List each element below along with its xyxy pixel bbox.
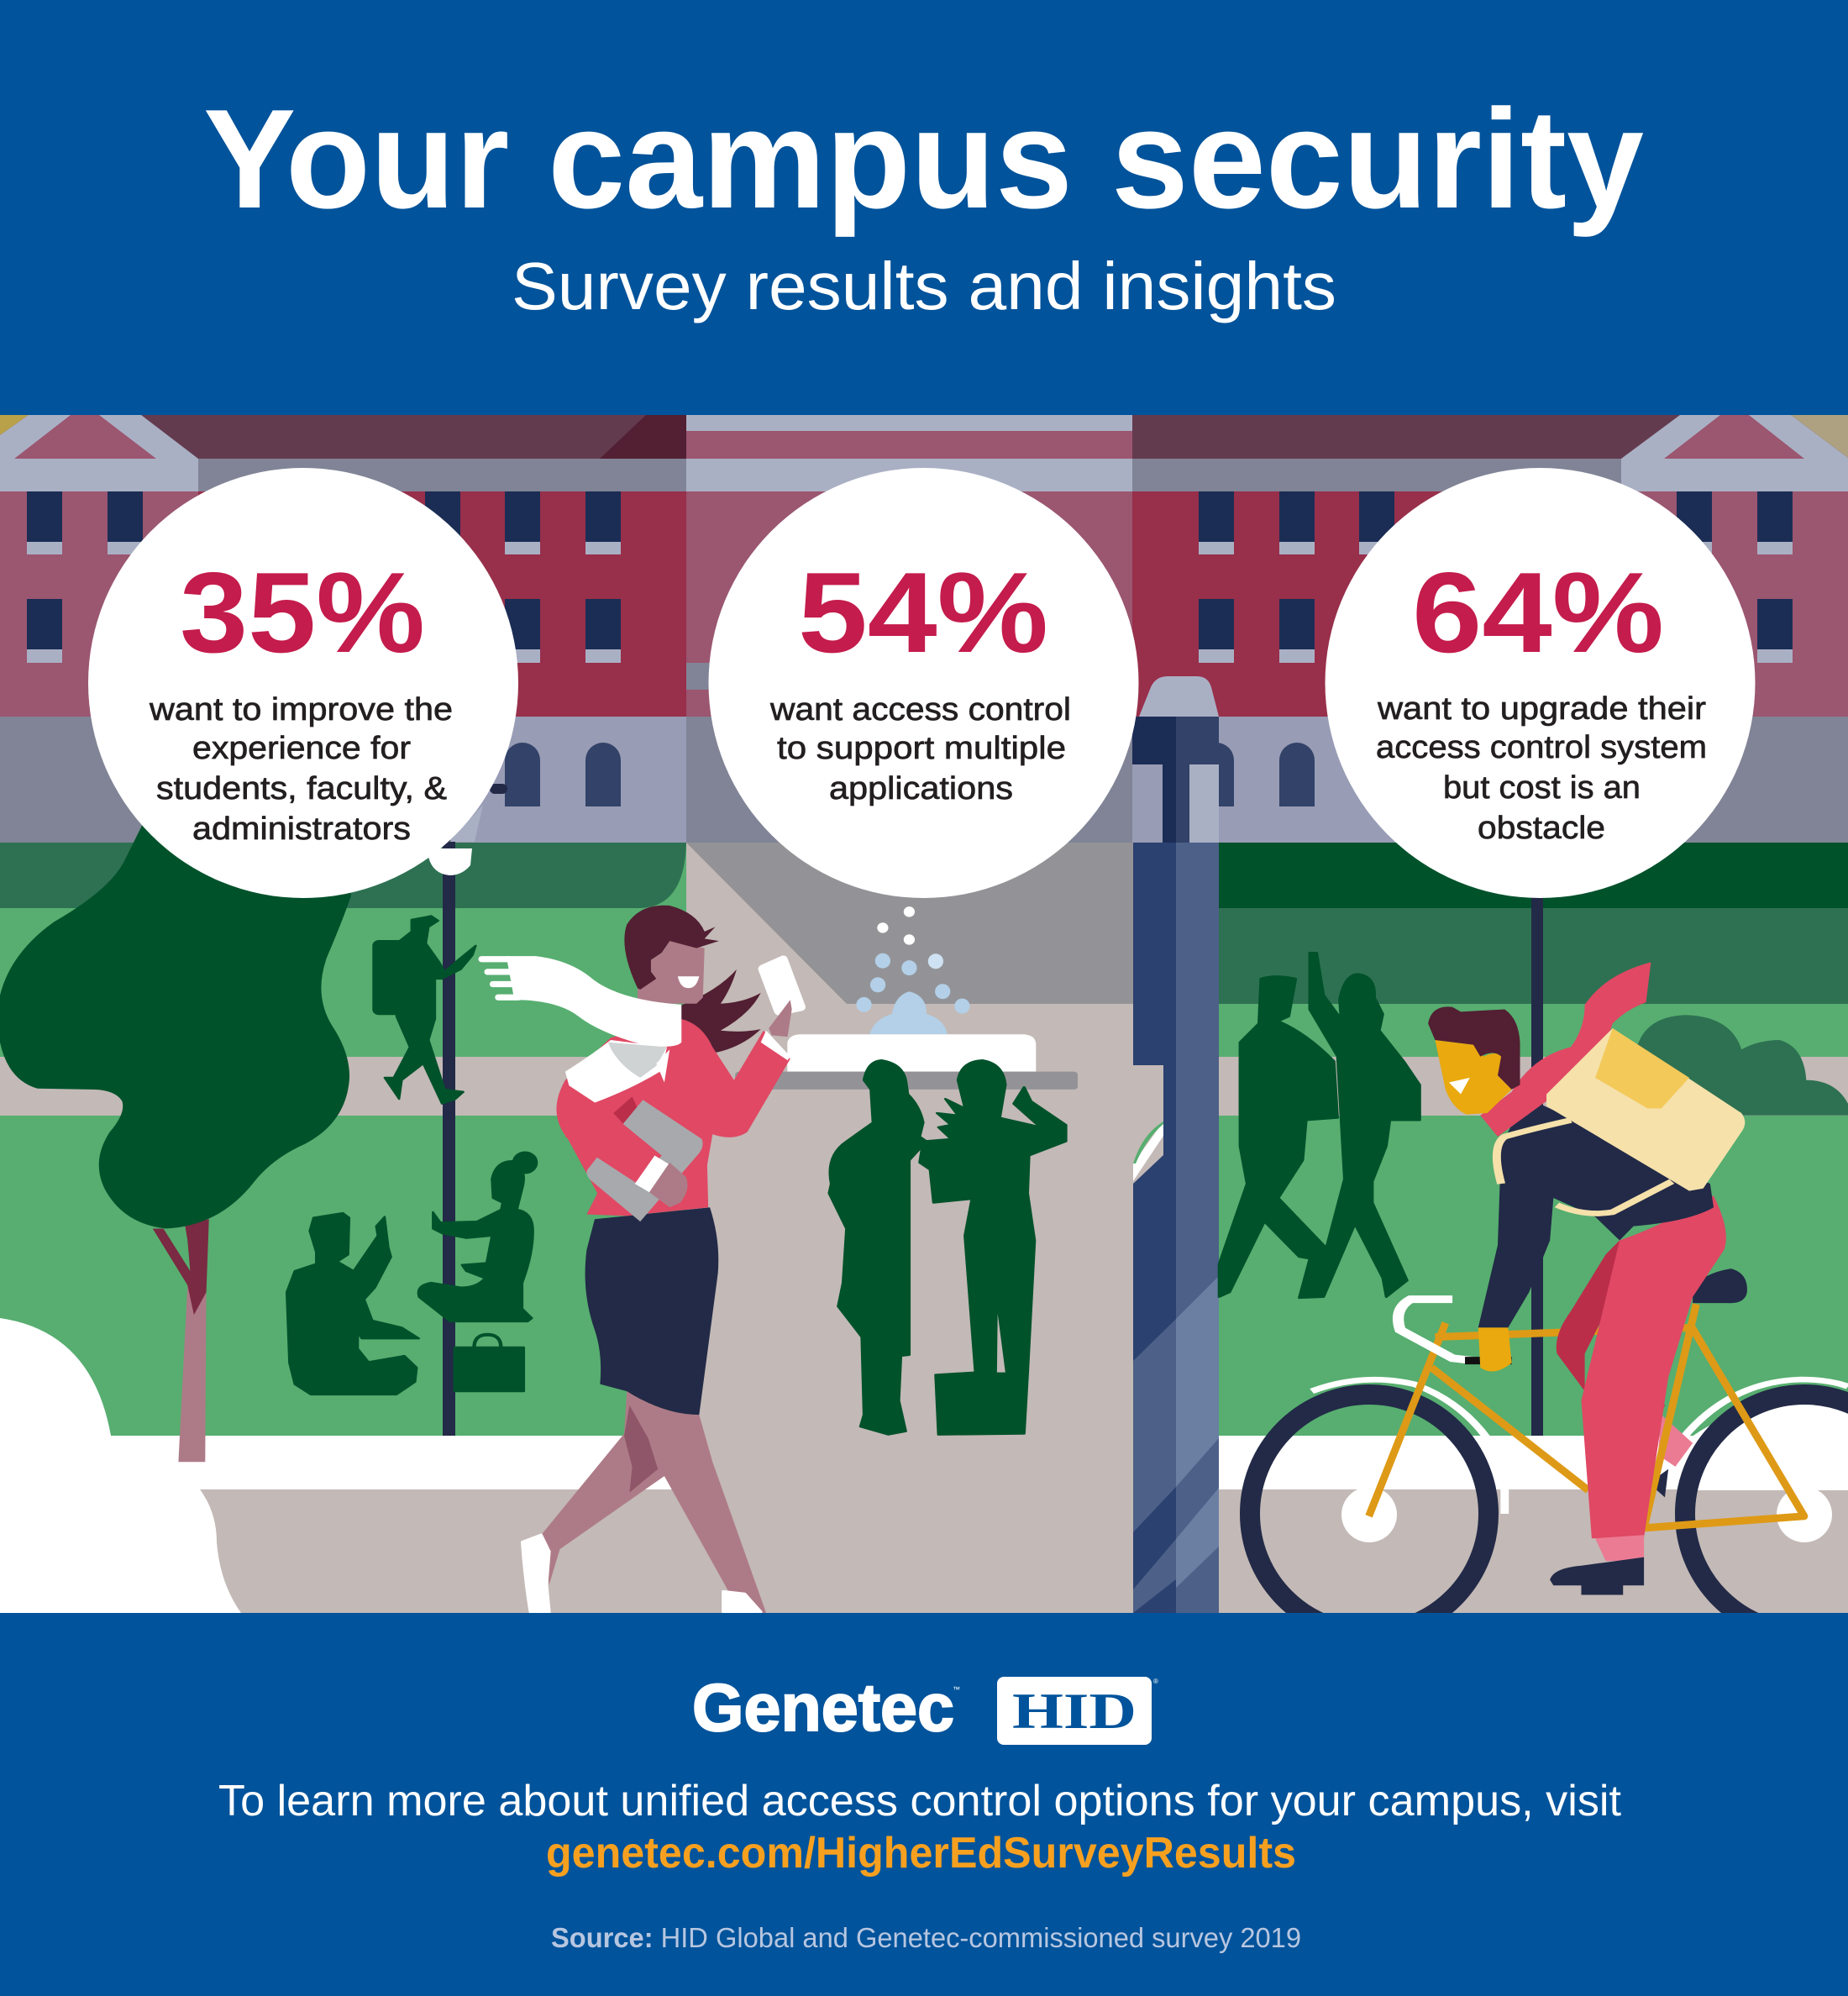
stat number: 54% [798, 549, 1048, 676]
stat circle: 35% [88, 468, 518, 898]
stat description: experience for [192, 731, 411, 766]
woman: phone and hand [758, 955, 806, 1060]
plaza and fountain ground [686, 843, 1133, 1613]
rear hub [1777, 1487, 1832, 1542]
central lamp post [1132, 676, 1219, 1613]
fountain [735, 906, 1078, 1090]
cyclist: scarf [1480, 962, 1651, 1137]
bicycle frame [1369, 1304, 1804, 1528]
left lamp post pole [443, 840, 455, 1436]
stat description: to support multiple [777, 731, 1066, 766]
stat number: 64% [1412, 549, 1664, 676]
cyclist: far leg [1626, 1382, 1693, 1497]
stat description [1376, 691, 1707, 846]
woman: legs [541, 1391, 766, 1613]
stat circle: 64% [1326, 468, 1756, 898]
bicycle mudguards [1312, 1379, 1848, 1514]
cyclist: trousers [1557, 1195, 1726, 1538]
silhouette: walking man [1219, 976, 1337, 1297]
source: Source: HID Global and Genetec-commissioned survey 2019 [551, 1922, 1301, 1953]
silhouette: walking woman [1299, 953, 1420, 1298]
stat description: students, faculty, & [156, 771, 447, 806]
stat description [769, 692, 1071, 806]
woman: arm and hand [565, 1085, 688, 1207]
stat circle: 54% [709, 468, 1139, 898]
silhouette: standing woman [829, 1060, 927, 1435]
stat description: want to upgrade their [1377, 691, 1706, 727]
woman: shoes [522, 1535, 761, 1612]
silhouette: standing man [920, 1060, 1066, 1435]
logo: HID [997, 1677, 1158, 1745]
campus building [0, 415, 1848, 843]
gap between standing man's legs [997, 1313, 1005, 1373]
stat description: access control system [1376, 730, 1707, 765]
silhouette: walker with backpack [374, 916, 475, 1104]
stat description: want to improve the [149, 692, 453, 727]
logo: HID: HID [1012, 1683, 1137, 1739]
silhouette: seated woman [418, 1153, 537, 1321]
stat description: obstacle [1478, 811, 1605, 846]
link: genetec.com/HigherEdSurveyResults [546, 1829, 1296, 1878]
call to action: To learn more about unified access control options for your campus, visit [218, 1777, 1622, 1825]
bicycle saddle [1693, 1269, 1747, 1303]
woman: ponytail [680, 969, 761, 1053]
right lamp post pole [1531, 890, 1543, 1436]
messenger bag [1497, 1028, 1745, 1213]
front hub [1341, 1487, 1397, 1542]
cyclist: torso and arm [1478, 1104, 1714, 1327]
stat description: but cost is an [1443, 770, 1641, 806]
silhouettes: students on the left lawn [286, 916, 537, 1395]
title: Your campus security [203, 80, 1644, 238]
woman: scarf [479, 956, 681, 1107]
woman: head [624, 906, 719, 1004]
tree [0, 788, 351, 1462]
stat description: applications [829, 771, 1013, 806]
lawn and paths right [1219, 843, 1848, 1613]
lamp head near first circle [428, 784, 507, 875]
lawn and paths left [0, 843, 686, 1613]
woman: torso [556, 1019, 790, 1216]
woman walking with phone [479, 906, 806, 1613]
logo: HID: ® [1153, 1678, 1158, 1685]
stat description [149, 692, 453, 847]
rear wheel white area [1683, 1403, 1848, 1490]
silhouette: seated man [286, 1213, 419, 1395]
cyclist: head [1428, 1006, 1520, 1115]
stat number: 35% [180, 549, 425, 676]
handlebar [1399, 1300, 1512, 1361]
cyclist: glove [1478, 1327, 1512, 1372]
cyclist and bicycle [1250, 962, 1848, 1633]
woman: folder [586, 1096, 703, 1221]
silhouettes: people at fountain and couple [829, 953, 1420, 1435]
stat description: administrators [192, 812, 411, 847]
logo: Genetec: Genetec [692, 1670, 954, 1745]
footer band [0, 1613, 1848, 1996]
front wheel [1250, 1395, 1488, 1633]
stat description: want access control [769, 692, 1071, 727]
bush [1635, 1015, 1848, 1116]
logo: Genetec: ™ [953, 1685, 960, 1694]
silhouette: bag [454, 1335, 524, 1391]
subtitle: Survey results and insights [512, 249, 1336, 323]
cyclist: ankle and shoe [1550, 1535, 1644, 1595]
rear wheel [1685, 1395, 1848, 1633]
woman: skirt [585, 1207, 718, 1415]
